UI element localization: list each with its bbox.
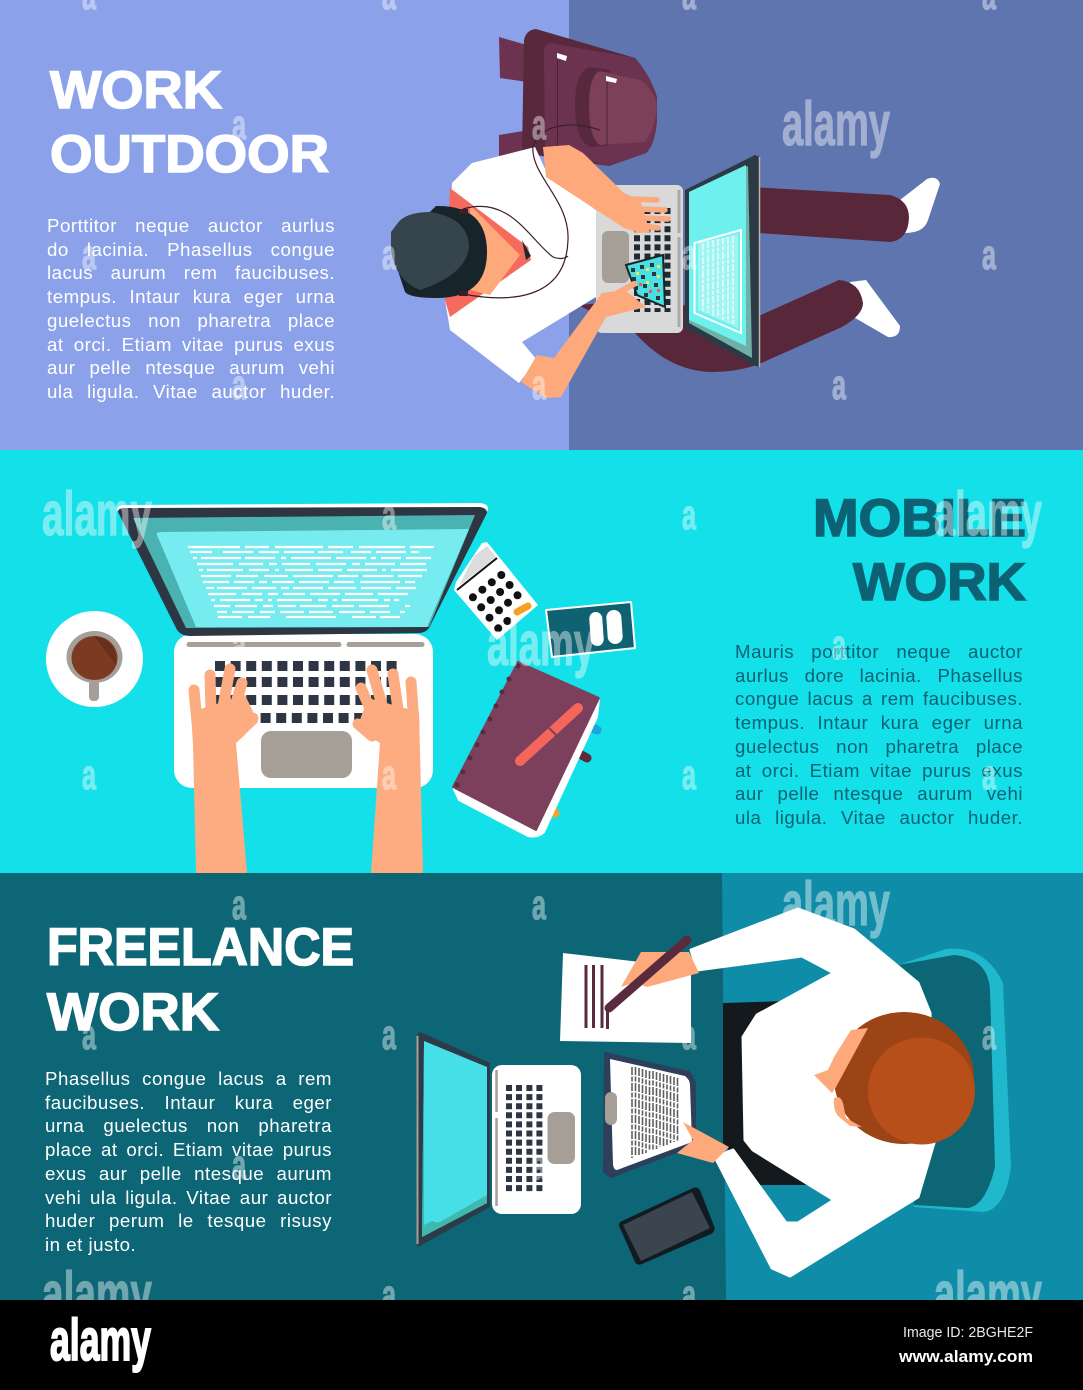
watermark: alamy stock marks: a (832, 361, 846, 408)
text: freelance work paragraph: faucibuses. Intaur kura eger (45, 1092, 332, 1113)
illustration: man with orange hair (607, 909, 975, 1276)
watermark: alamy stock marks: a (82, 231, 96, 278)
illustration: black seat (723, 1001, 806, 1185)
illustration: legs and shoes (578, 178, 940, 372)
icon: calculator (454, 542, 538, 640)
illustration: chair (898, 949, 1011, 1212)
text: mobile work paragraph: Mauris porttitor neque auctor (735, 641, 1023, 662)
heading: mobile work (813, 489, 1026, 612)
text lines on large screen (188, 547, 435, 617)
watermark: alamy stock marks: a (682, 751, 696, 798)
panel: freelance work (0, 873, 1083, 1300)
watermark: alamy stock marks: a (382, 491, 396, 538)
icon: coffee cup (46, 611, 143, 707)
watermark: alamy stock marks: a (682, 231, 696, 278)
watermark: alamy stock marks: a (82, 751, 96, 798)
text: image id: Image ID: 2BGHE2F (903, 1324, 1033, 1341)
watermark: alamy stock marks: a (832, 1141, 846, 1188)
icon: paper sheet (560, 953, 691, 1043)
illustration: laptop outdoor (596, 155, 760, 367)
illustration: spiral notebook with pen (453, 662, 599, 836)
text: mobile work paragraph (735, 641, 1023, 828)
text: work outdoor paragraph: Porttitor neque auctor aurlus (47, 215, 335, 236)
text: work outdoor paragraph: aur pelle ntesque aurum vehi (47, 357, 335, 378)
text: freelance work paragraph: huder perum le tesque risusy (45, 1210, 332, 1231)
text: mobile work paragraph: ula ligula. Vitae auctor huder. (735, 807, 1023, 828)
watermark: alamy stock marks: alamy (782, 870, 890, 939)
text: work outdoor paragraph: at orci. Etiam vitae purus exus (47, 334, 335, 355)
text: freelance work paragraph: vehi ula ligula. Vitae aur auctor (45, 1187, 332, 1208)
illustration: large laptop (117, 503, 488, 788)
watermark: alamy stock marks: a (532, 881, 546, 928)
text: work outdoor paragraph (47, 215, 335, 402)
icon: earphone cables (463, 125, 600, 298)
panel: mobile work (0, 450, 1083, 874)
watermark: alamy stock marks: a (382, 751, 396, 798)
watermark: alamy stock marks: a (232, 881, 246, 928)
heading: mobile work: WORK (853, 553, 1026, 612)
illustration: backpack (499, 29, 657, 166)
text: mobile work paragraph: guelectus non pharetra place (735, 736, 1023, 757)
text: mobile work paragraph: congue lacus a rem faucibuses. (735, 688, 1023, 709)
heading: work outdoor: OUTDOOR (50, 125, 329, 184)
watermark: alamy stock marks: a (982, 751, 996, 798)
text: freelance work paragraph: urna guelectus non pharetra (45, 1115, 332, 1136)
watermark: alamy stock marks: a (832, 621, 846, 668)
heading: freelance work (47, 918, 354, 1042)
text: website: www.alamy.com (898, 1348, 1033, 1366)
watermark: alamy stock marks: a (232, 101, 246, 148)
text: freelance work paragraph: in et justo. (45, 1234, 136, 1255)
watermark: alamy stock marks: alamy (487, 610, 595, 679)
text: work outdoor paragraph: guelectus non pharetra place (47, 310, 335, 331)
text: mobile work paragraph: tempus. Intaur kura eger urna (735, 712, 1023, 733)
icon: phone with apps (626, 255, 665, 307)
watermark: alamy stock marks: a (982, 231, 996, 278)
text: freelance work paragraph: exus aur pelle ntesque aurum (45, 1163, 332, 1184)
illustration: laptop freelance (417, 1032, 581, 1246)
text: mobile work paragraph: aurlus dore lacinia. Phasellus (735, 665, 1023, 686)
watermark: alamy stock marks: a (382, 231, 396, 278)
watermark: alamy stock marks: a (232, 621, 246, 668)
watermark: alamy stock marks: a (382, 1011, 396, 1058)
watermark: alamy stock marks: a (232, 1141, 246, 1188)
illustration: typing hands (191, 669, 423, 873)
text: freelance work paragraph (45, 1068, 332, 1255)
watermark: alamy stock marks: a (532, 1141, 546, 1188)
panel: footer bar (0, 1300, 1083, 1390)
logo: alamy: alamy (50, 1308, 151, 1373)
text: freelance work paragraph: place at orci. Etiam vitae purus (45, 1139, 332, 1160)
heading: mobile work: MOBILE (813, 489, 1026, 548)
text: work outdoor paragraph: tempus. Intaur kura eger urna (47, 286, 335, 307)
watermark: alamy stock marks: alamy (782, 90, 890, 159)
icon: card with pills (546, 602, 635, 657)
heading: freelance work: WORK (47, 983, 219, 1042)
watermark: alamy stock marks: alamy (42, 480, 152, 549)
watermark: alamy stock marks: a (682, 491, 696, 538)
watermark: alamy stock marks: a (82, 1011, 96, 1058)
heading: work outdoor (50, 61, 329, 184)
text: work outdoor paragraph: do lacinia. Phasellus congue (47, 239, 335, 260)
watermark: alamy stock marks: a (532, 101, 546, 148)
text: work outdoor paragraph: lacus aurum rem faucibuses. (47, 262, 335, 283)
text: work outdoor paragraph: ula ligula. Vitae auctor huder. (47, 381, 335, 402)
watermark: alamy stock marks: a (232, 361, 246, 408)
icon: smartphone (619, 1187, 715, 1265)
watermark: alamy stock marks: a (982, 1011, 996, 1058)
watermark: alamy stock marks: a (682, 1011, 696, 1058)
text: mobile work paragraph: at orci. Etiam vitae purus exus (735, 760, 1023, 781)
panel: work outdoor (0, 0, 1083, 450)
heading: freelance work: FREELANCE (47, 918, 354, 977)
icon: clipboard (604, 1053, 695, 1177)
illustration: man body and arms (391, 125, 668, 398)
heading: work outdoor: WORK (50, 61, 222, 120)
watermark: alamy stock marks: a (532, 361, 546, 408)
text: mobile work paragraph: aur pelle ntesque aurum vehi (735, 783, 1023, 804)
text: freelance work paragraph: Phasellus congue lacus a rem (45, 1068, 332, 1089)
